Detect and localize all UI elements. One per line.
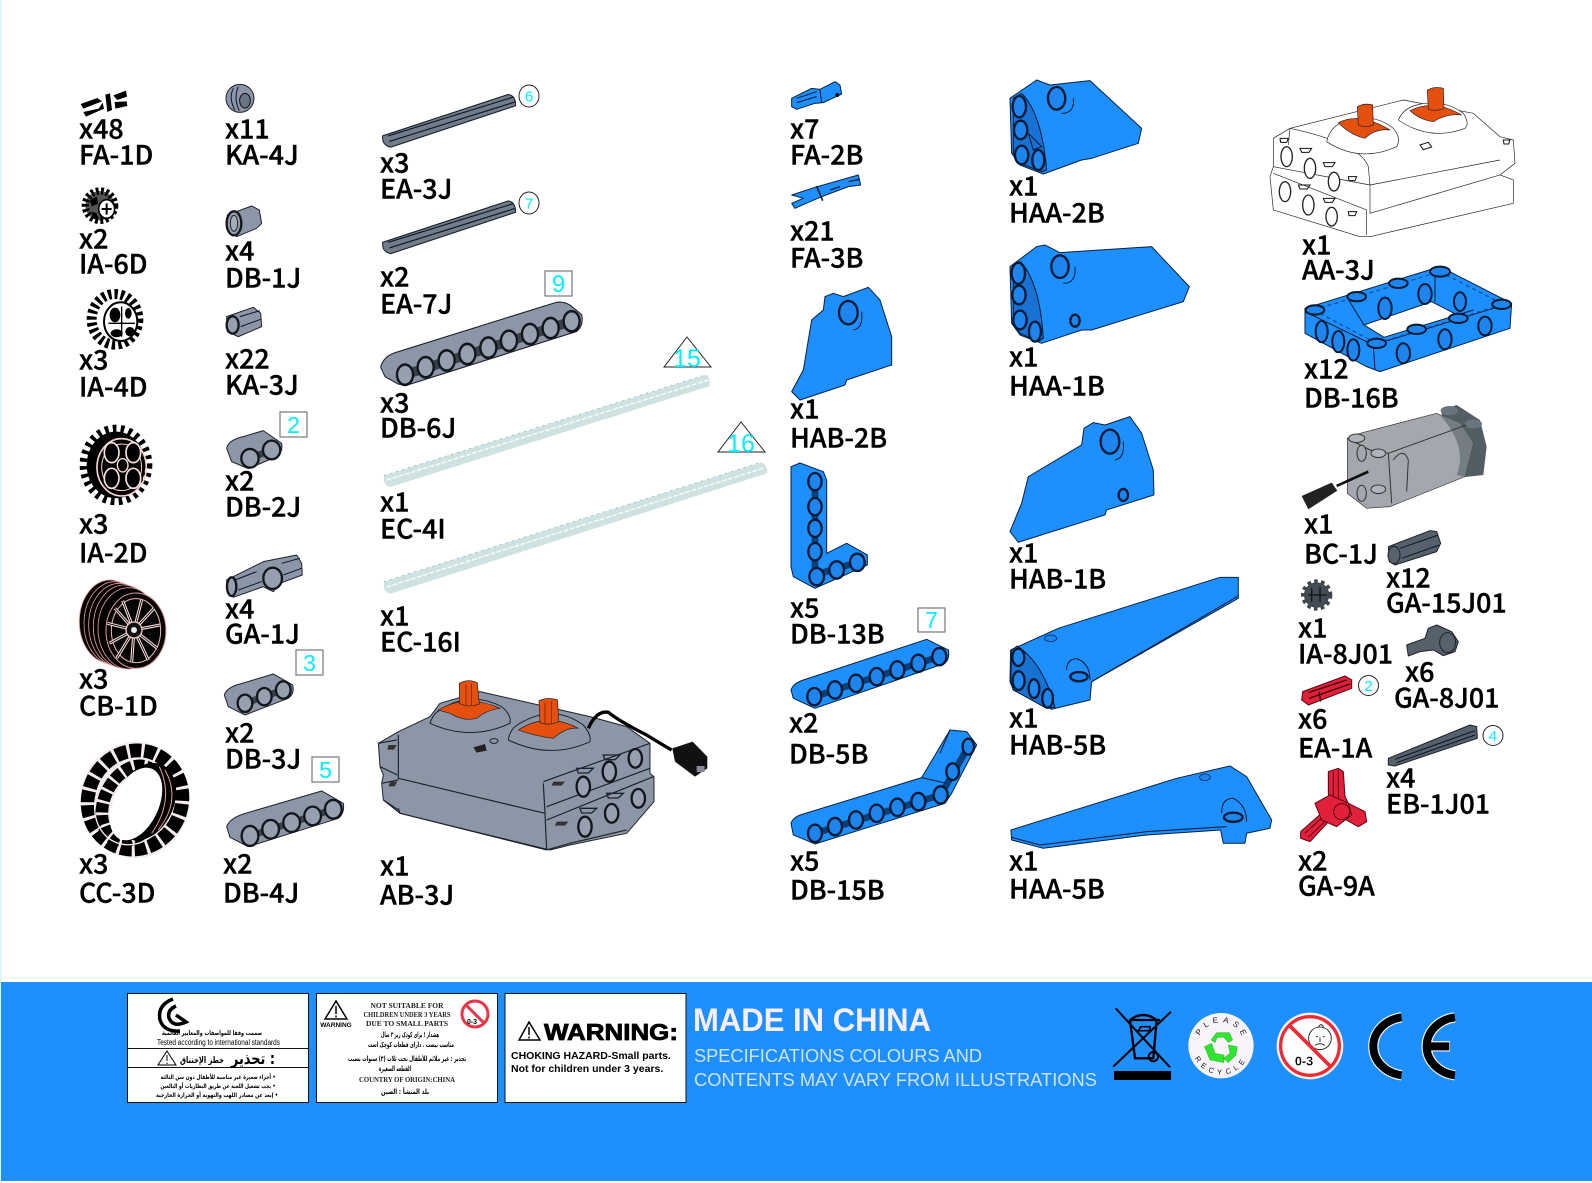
tag: 7	[918, 607, 945, 633]
english text: DUE TO SMALL PARTS	[366, 1019, 448, 1028]
label: x12	[1386, 556, 1431, 596]
arabic bullets: إبعد عن مصادر اللهب والتهوية أو الحرارة الخارجية •	[156, 1091, 278, 1099]
tag: 6	[519, 85, 539, 107]
label: DB-13B	[790, 612, 885, 652]
icon: blue wing panel	[1011, 766, 1272, 848]
label: x6	[1298, 698, 1327, 736]
label: x21	[790, 210, 835, 248]
label: FA-2B	[790, 134, 863, 172]
part: x48 FA-1D	[79, 91, 153, 172]
warning box: not suitable for children: WARNING	[320, 1022, 352, 1029]
part: x5 DB-15B	[790, 730, 977, 908]
label: x48	[79, 108, 124, 146]
label: HAA-2B	[1009, 192, 1105, 230]
label: x2	[225, 712, 254, 750]
part: x2 DB-4J with tag 5	[223, 757, 344, 910]
icon: blue L beam	[791, 463, 867, 588]
label: GA-1J	[225, 612, 300, 652]
icon: blue panel	[1010, 417, 1154, 542]
warning triangle	[519, 1022, 540, 1040]
english text: NOT SUITABLE FOR	[370, 1001, 444, 1010]
icon: blue long pin	[792, 175, 861, 208]
persian and arabic text: هشدار ! برای کودک زیر ۳ سال	[381, 1031, 439, 1039]
part: x1 IA-8J01	[1298, 582, 1393, 672]
label: x3	[79, 658, 108, 696]
label: x1	[1009, 336, 1038, 374]
icon: dark long axle	[1388, 725, 1477, 766]
warning triangle	[158, 1051, 176, 1065]
part: x3 DB-6J with tag 9	[380, 271, 582, 446]
icon: small dark gear	[1304, 582, 1329, 608]
tag: 2: 2	[1364, 678, 1373, 695]
persian and arabic text: القطعة الصغيرة	[379, 1065, 411, 1073]
label: DB-3J	[225, 738, 301, 776]
label: x5	[790, 586, 819, 626]
label: x6	[1405, 650, 1434, 690]
tag: 3: 3	[303, 650, 316, 676]
label: DB-4J	[223, 872, 299, 910]
part: x1 EC-4I with tag 15	[380, 337, 711, 546]
icon: 2-hole beam	[227, 431, 282, 469]
tag: 5	[312, 757, 339, 783]
icon: white battery box line drawing	[1270, 87, 1515, 237]
label: x1	[1009, 840, 1038, 878]
icon: 9-hole beam	[381, 302, 582, 385]
part: x22 KA-3J	[225, 307, 299, 402]
label: x1	[1302, 224, 1331, 262]
label: DB-16B	[1304, 376, 1399, 416]
part: x2 DB-2J with tag 2	[225, 412, 307, 524]
label: x2	[79, 218, 108, 256]
part: x1 AA-3J	[1270, 87, 1515, 288]
persian and arabic text	[348, 1031, 466, 1073]
part: x1 HAA-1B	[1009, 245, 1189, 404]
part: x3 CC-3D	[72, 735, 198, 910]
part: x2 EA-7J with tag 7	[380, 192, 539, 322]
part: x1 EC-16I with tag 16	[380, 422, 767, 660]
arabic bullets	[156, 1073, 278, 1099]
label: EA-1A	[1298, 726, 1373, 766]
part: x1 HAA-5B	[1009, 766, 1272, 906]
part: x2 DB-3J with tag 3	[224, 650, 323, 776]
icon: blue wing panel	[1010, 577, 1238, 709]
part: x21 FA-3B	[790, 175, 863, 276]
label: IA-6D	[79, 242, 148, 282]
part: x1 HAB-5B	[1009, 577, 1238, 762]
part: x2 GA-9A	[1298, 768, 1375, 904]
label: EA-7J	[380, 282, 452, 322]
icon: dark connector	[1388, 531, 1441, 565]
part: x4 DB-1J	[225, 206, 301, 296]
label: BC-1J	[1304, 532, 1378, 572]
icon: blue pin	[792, 82, 842, 109]
warning box: not suitable for children	[316, 994, 498, 1102]
icon: axle	[383, 201, 516, 254]
icon: tyre	[72, 735, 198, 865]
icon: axle connector cross	[227, 555, 302, 597]
icon: logo	[160, 999, 186, 1031]
label: x2	[225, 460, 254, 498]
part: x1 AB-3J	[378, 681, 707, 912]
part: x12 GA-15J01	[1386, 531, 1507, 620]
icon: motor with cable	[1302, 405, 1487, 509]
label: x1	[1009, 532, 1038, 570]
icon: small gear	[85, 191, 115, 220]
icon: blue 7-hole beam	[791, 639, 949, 708]
persian and arabic text: مناسب نیست . دارای قطعات کوچک است	[368, 1041, 454, 1049]
tag: 2: 2	[287, 412, 300, 438]
tag: 6: 6	[525, 88, 533, 106]
label: x1	[1304, 502, 1333, 542]
icon: large gear	[83, 428, 149, 502]
part: x4 GA-1J	[225, 555, 302, 652]
label: x3	[79, 502, 108, 542]
specifications text: CONTENTS MAY VARY FROM ILLUSTRATIONS	[694, 1069, 1097, 1090]
part: x3 EA-3J with tag 6	[380, 85, 539, 206]
label: HAA-1B	[1009, 364, 1105, 404]
label: x1	[1298, 606, 1327, 646]
warning box: choking hazard	[505, 994, 686, 1102]
label: DB-2J	[225, 486, 301, 524]
persian and arabic text: تحذير : غير ملائم للأطفال تحت ثلاث (٣) سنوات بسبب	[348, 1054, 466, 1063]
icon: no under 3: 0-3	[467, 1019, 477, 1026]
arabic origin: بلد المنشأ : الصين	[381, 1087, 429, 1096]
icon: red three-way connector	[1301, 768, 1367, 842]
icon: longest light axle	[384, 462, 767, 594]
label: IA-8J01	[1298, 632, 1393, 672]
label: x4	[225, 588, 254, 626]
icon: please recycle: PLEASE	[1196, 1017, 1247, 1036]
label: GA-15J01	[1386, 582, 1507, 620]
part: x5 DB-13B	[790, 463, 885, 652]
label: DB-6J	[380, 406, 456, 446]
label: HAB-5B	[1009, 724, 1106, 762]
icon: blue frame	[1305, 267, 1512, 372]
part: x1 HAB-2B	[790, 287, 892, 456]
icon: wheel	[79, 580, 166, 669]
label: CB-1D	[79, 684, 158, 724]
label: x11	[225, 108, 270, 146]
tag: 9	[545, 271, 572, 298]
label: KA-4J	[225, 134, 299, 172]
label: DB-5B	[789, 732, 868, 772]
icon: grey motor box with cable	[378, 681, 707, 850]
icon: 3-hole beam	[224, 674, 293, 715]
label: EC-16I	[380, 620, 461, 660]
label: x2	[1298, 840, 1327, 878]
tag: 7: 7	[925, 607, 938, 633]
icon: medium gear	[92, 294, 138, 345]
label: EC-4I	[380, 508, 446, 546]
tag: 4: 4	[1489, 728, 1497, 745]
arabic warning word: تحذير :	[230, 1049, 275, 1068]
arabic bullets: يجب تشغيل اللعبة عن طريق البطاريات أو البالغين •	[160, 1082, 276, 1090]
icon: blue panel	[1010, 80, 1142, 174]
part: x2 IA-6D	[79, 191, 148, 282]
icon: please recycle	[1188, 1013, 1254, 1078]
label: x3	[79, 338, 108, 378]
icon: tube	[227, 206, 262, 237]
label: HAB-1B	[1009, 558, 1106, 596]
part: x4 EB-1J01 with tag 4	[1386, 725, 1503, 822]
label: DB-1J	[225, 256, 301, 296]
icon: blue bent beam	[791, 730, 977, 844]
warning heading: WARNING:	[544, 1019, 678, 1045]
part: x1 BC-1J	[1302, 405, 1487, 572]
english text	[364, 1001, 450, 1028]
label: x2	[789, 702, 818, 740]
label: x1	[380, 480, 409, 520]
label: GA-8J01	[1394, 676, 1499, 716]
arabic hazard words: خطر الإختناق	[180, 1056, 224, 1066]
warning box: tested to international standards	[127, 994, 308, 1102]
label: HAB-2B	[790, 416, 887, 456]
label: GA-9A	[1298, 864, 1375, 904]
tag: 15: 15	[673, 345, 701, 373]
part: x7 FA-2B	[790, 82, 863, 172]
label: EB-1J01	[1386, 782, 1490, 822]
icon: red axle	[1302, 676, 1352, 705]
label: x1	[380, 844, 409, 884]
label: x3	[380, 382, 409, 420]
label: x1	[1009, 164, 1038, 204]
label: IA-2D	[79, 532, 148, 570]
label: x7	[790, 108, 819, 146]
arabic standards line: صممت وفقا للمواصفات والمعايير العالمية	[162, 1029, 262, 1037]
footer band	[1, 982, 1592, 1181]
label: x22	[225, 338, 270, 376]
label: CC-3D	[79, 872, 155, 910]
part: x11 KA-4J	[225, 84, 299, 172]
part: x3 IA-4D	[79, 294, 148, 404]
icon: 5-hole beam	[227, 791, 344, 847]
icon: not for under 3: 0-3	[1295, 1054, 1313, 1068]
label: x12	[1304, 348, 1349, 386]
tag: 15	[664, 337, 711, 373]
label: AB-3J	[380, 874, 454, 912]
label: DB-15B	[790, 868, 885, 908]
choking text: CHOKING HAZARD-Small parts.	[511, 1050, 671, 1062]
label: x1	[1009, 696, 1038, 736]
label: FA-3B	[790, 236, 863, 276]
icon: blue panel	[792, 287, 892, 400]
icon: bush	[226, 84, 254, 112]
icon: dark angled pin	[1407, 625, 1458, 656]
icon: crossed-out bin	[1113, 1008, 1171, 1080]
icon: long light axle	[384, 375, 710, 487]
part: x3 CB-1D	[79, 580, 166, 724]
tag: 7: 7	[525, 196, 533, 212]
label: x2	[380, 256, 409, 294]
label: AA-3J	[1302, 248, 1375, 288]
label: KA-3J	[225, 364, 299, 402]
part: x6 GA-8J01	[1394, 625, 1499, 716]
part: x12 DB-16B	[1304, 267, 1512, 416]
icon: CE mark	[1373, 1017, 1455, 1075]
english text: CHILDREN UNDER 3 YEARS	[364, 1010, 450, 1019]
icon: axle connector	[227, 307, 262, 337]
tag: 7	[519, 192, 539, 214]
icon: no under 3	[462, 1001, 488, 1027]
icon: axle	[383, 94, 516, 147]
country of origin: COUNTRY OF ORIGIN:CHINA	[359, 1075, 456, 1084]
tested caption: Tested according to international standards	[157, 1038, 280, 1047]
label: x1	[380, 594, 409, 634]
tag: 16: 16	[727, 430, 755, 458]
icon: black pin	[81, 91, 127, 117]
warning triangle	[325, 1001, 347, 1019]
part: x3 IA-2D	[79, 428, 149, 570]
specifications text: SPECIFICATIONS COLOURS AND	[694, 1045, 982, 1066]
label: x2	[223, 842, 252, 882]
tag: 5: 5	[319, 757, 332, 783]
tag: 16	[718, 422, 765, 458]
label: x1	[790, 388, 819, 426]
icon: please recycle: RECYCLE	[1195, 1056, 1245, 1074]
label: x3	[380, 142, 409, 180]
choking text: Not for children under 3 years.	[511, 1063, 663, 1075]
icon: blue long panel	[1010, 245, 1189, 343]
label: x4	[225, 230, 254, 268]
part: x1 HAA-2B	[1009, 80, 1142, 231]
part: x1 HAB-1B	[1009, 417, 1154, 596]
icon: not for under 3	[1277, 1013, 1343, 1079]
label: EA-3J	[380, 168, 452, 206]
part: x6 EA-1A with tag 2	[1298, 676, 1378, 766]
label: x5	[790, 840, 819, 878]
label: x3	[79, 842, 108, 882]
label: HAA-5B	[1009, 868, 1105, 906]
part: x2 DB-5B with tag 7	[789, 607, 949, 772]
label: FA-1D	[79, 134, 153, 172]
arabic bullets: أجزاء صغيرة غير مناسبة للأطفال دون سن الثالثة •	[160, 1073, 275, 1081]
label: IA-4D	[79, 366, 148, 404]
made in china heading: MADE IN CHINA	[693, 1002, 931, 1038]
tag: 9: 9	[552, 271, 565, 298]
label: x4	[1386, 756, 1415, 796]
